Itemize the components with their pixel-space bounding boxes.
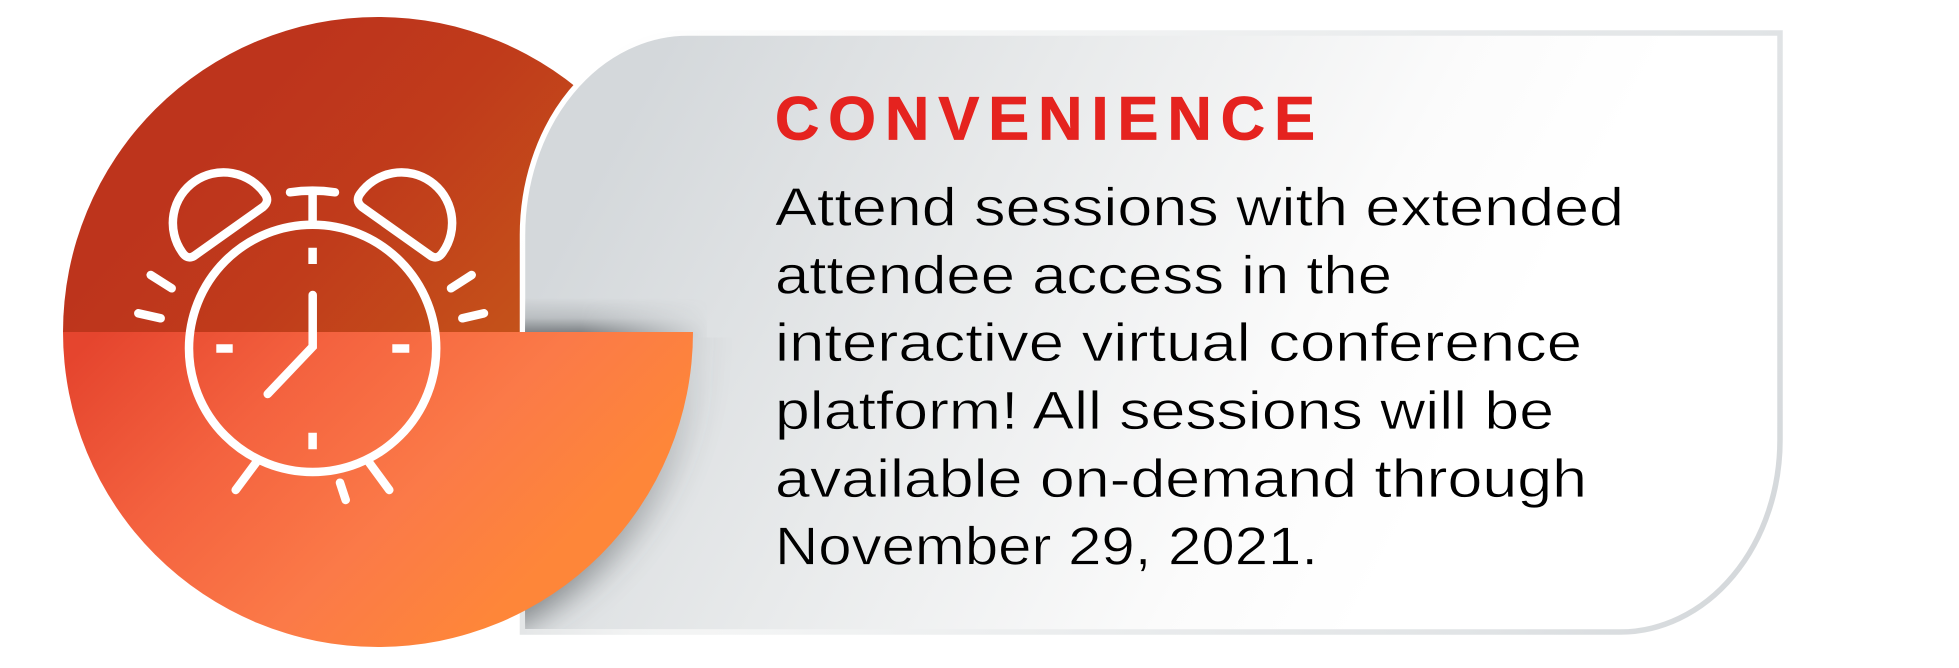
body text: [775, 178, 1624, 577]
body text: attendee access in the: [775, 245, 1392, 305]
shadow cast on panel: [525, 303, 702, 629]
circle lower half: [63, 332, 693, 647]
clock feet: [236, 463, 389, 500]
circle upper half: [63, 17, 693, 332]
body text: available on-demand through: [775, 449, 1587, 509]
text panel: [522, 33, 1780, 632]
body text: interactive virtual conference: [775, 313, 1582, 373]
body text: November 29, 2021.: [775, 517, 1318, 577]
hour ticks: [216, 248, 409, 449]
left ring marks: [138, 275, 172, 318]
clock hands: [268, 295, 313, 394]
top handle: [290, 191, 335, 222]
left bell: [173, 172, 267, 257]
clock face: [189, 225, 436, 472]
right bell: [358, 172, 452, 257]
heading: CONVENIENCE: [775, 84, 1324, 152]
body text: Attend sessions with extended: [775, 178, 1624, 238]
right ring marks: [451, 275, 484, 318]
body text: platform! All sessions will be: [775, 381, 1554, 441]
icon: alarm clock: [138, 172, 484, 500]
